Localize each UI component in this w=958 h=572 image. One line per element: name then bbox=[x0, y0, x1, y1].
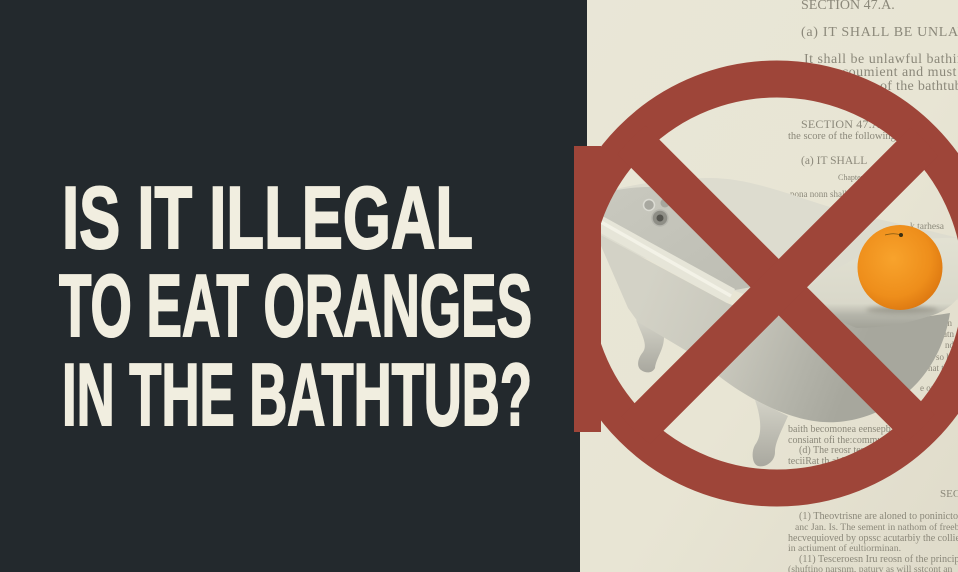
title: IN THE BATHTUB? bbox=[62, 345, 532, 444]
legal text on paper: consiant ofi the:commu bbox=[788, 435, 882, 446]
title: TO EAT ORANGES bbox=[59, 256, 532, 355]
legal text on paper: SECTION 47.A. orders is bbox=[801, 117, 930, 131]
title bbox=[59, 168, 532, 444]
legal text on paper: teciiRat th ald of man subject bbox=[788, 456, 906, 467]
legal text on paper: the score of the following statutes bbox=[788, 131, 930, 142]
tub front rim highlight bbox=[601, 216, 735, 290]
legal text on paper: anc Jan. Is. The sement in nathom of freeb bbox=[795, 522, 958, 533]
left vertical bar bbox=[574, 146, 601, 432]
legal text on paper: k tarhesa bbox=[910, 222, 945, 232]
red X bbox=[628, 136, 928, 438]
tub outer body bbox=[595, 232, 950, 422]
tub foot: right bbox=[753, 400, 788, 466]
legal text on paper: Chapter of the TRI bbox=[838, 173, 899, 182]
legal text on paper: e on bbox=[920, 383, 936, 393]
legal text on paper: hecvequioved by opssc acutarbiy the collie bbox=[788, 533, 958, 544]
legal text on paper: atn bbox=[943, 329, 954, 339]
legal text on paper: (11) Tesceroesn Iru reosn of the princip bbox=[799, 554, 958, 565]
legal text on paper: (d) The reosr ter of okeave bbox=[799, 445, 906, 456]
illustration: clawfoot bathtub bbox=[595, 178, 958, 466]
tub right rim lip bbox=[820, 300, 956, 322]
title: IS IT ILLEGAL bbox=[62, 168, 473, 267]
prohibition sign bbox=[572, 79, 958, 488]
red ring bbox=[572, 79, 958, 488]
orange on the tub rim bbox=[858, 225, 942, 314]
legal text on paper: tn bbox=[945, 318, 953, 328]
overflow and drain fittings bbox=[644, 198, 670, 226]
legal text on paper: (1) Theovtrisne are aloned to poninicto bbox=[799, 511, 958, 522]
tub foot: left bbox=[636, 320, 664, 372]
legal text on paper: baith becomonea eensepb of pes bbox=[788, 424, 918, 435]
tub rim highlight streak bbox=[601, 222, 731, 296]
legal text on paper: in actiument of eultiorminan. bbox=[788, 543, 901, 554]
legal text on paper: (a) IT SHALL bbox=[801, 155, 867, 167]
legal text on paper: so h bbox=[936, 352, 951, 362]
legal text on paper: pona nonn shall be ned conos bbox=[790, 189, 897, 199]
legal text on paper: hat th bbox=[928, 363, 949, 373]
legal text on paper: nd bbox=[945, 340, 954, 350]
legal text on paper bbox=[788, 0, 958, 572]
panel: aged legal paper bbox=[580, 0, 958, 572]
tub basin interior bbox=[595, 187, 752, 290]
tub back rim bbox=[595, 178, 958, 300]
